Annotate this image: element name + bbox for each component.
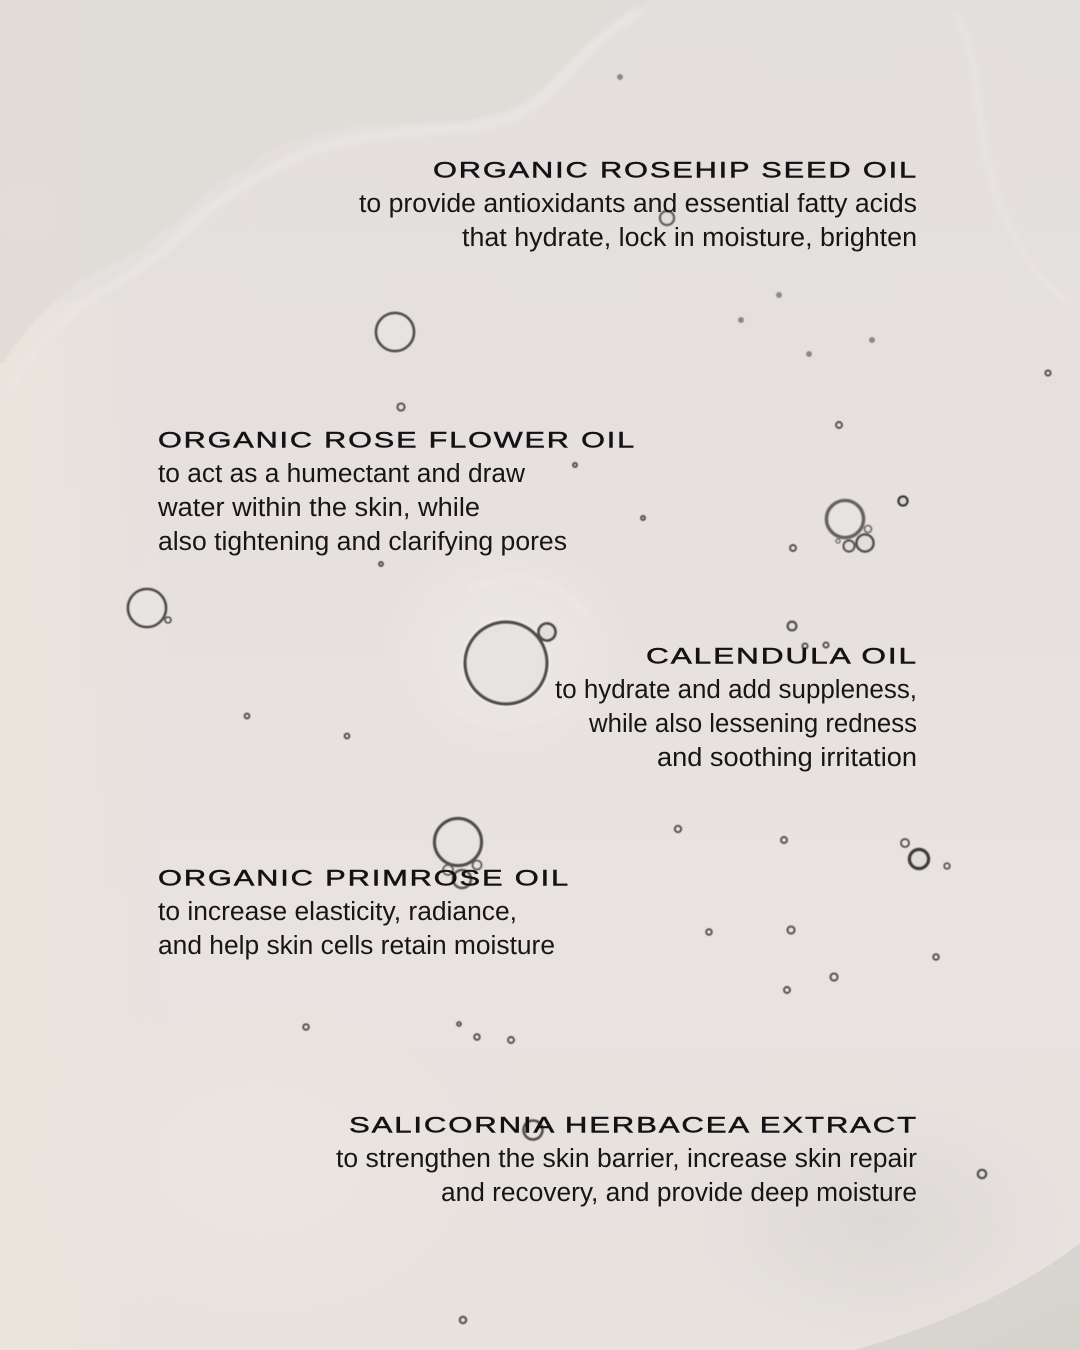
description: water within the skin, while: [157, 494, 480, 522]
heading: ORGANIC ROSEHIP SEED OIL: [433, 158, 918, 182]
description: to act as a humectant and draw: [158, 460, 526, 488]
bubble: upper cluster: [376, 211, 674, 351]
description: to increase elasticity, radiance,: [158, 898, 517, 926]
text block: calendula oil: [555, 644, 918, 772]
text block: salicornia herbacea extract: [336, 1112, 918, 1207]
bubble: left pair: [128, 589, 171, 627]
description: to hydrate and add suppleness,: [555, 676, 917, 704]
description: to strengthen the skin barrier, increase skin repair: [336, 1145, 918, 1173]
description: [336, 1145, 918, 1207]
description: and recovery, and provide deep moisture: [441, 1179, 917, 1207]
description: [359, 190, 917, 252]
description: [158, 898, 555, 960]
description: while also lessening redness: [588, 710, 917, 738]
description: and help skin cells retain moisture: [158, 932, 555, 960]
description: [555, 676, 917, 772]
text block: organic rose flower oil: [157, 428, 636, 556]
description: that hydrate, lock in moisture, brighten: [462, 224, 917, 252]
bubbles: small scattered droplets: [245, 75, 1051, 1323]
bubble: primrose cluster: [434, 818, 482, 888]
description: [157, 460, 567, 556]
text block: organic rosehip seed oil: [359, 158, 918, 252]
bubble: right cluster: [826, 496, 908, 552]
description: also tightening and clarifying pores: [158, 528, 567, 556]
heading: SALICORNIA HERBACEA EXTRACT: [349, 1112, 918, 1138]
heading: ORGANIC ROSE FLOWER OIL: [158, 428, 636, 452]
text block: organic primrose oil: [158, 866, 570, 960]
heading: ORGANIC PRIMROSE OIL: [158, 866, 570, 890]
bubble: lower right cluster: [901, 839, 950, 869]
heading: CALENDULA OIL: [646, 644, 918, 668]
bubble: large central bubble: [462, 620, 556, 706]
description: to provide antioxidants and essential fatty acids: [359, 190, 917, 218]
description: and soothing irritation: [657, 744, 917, 772]
